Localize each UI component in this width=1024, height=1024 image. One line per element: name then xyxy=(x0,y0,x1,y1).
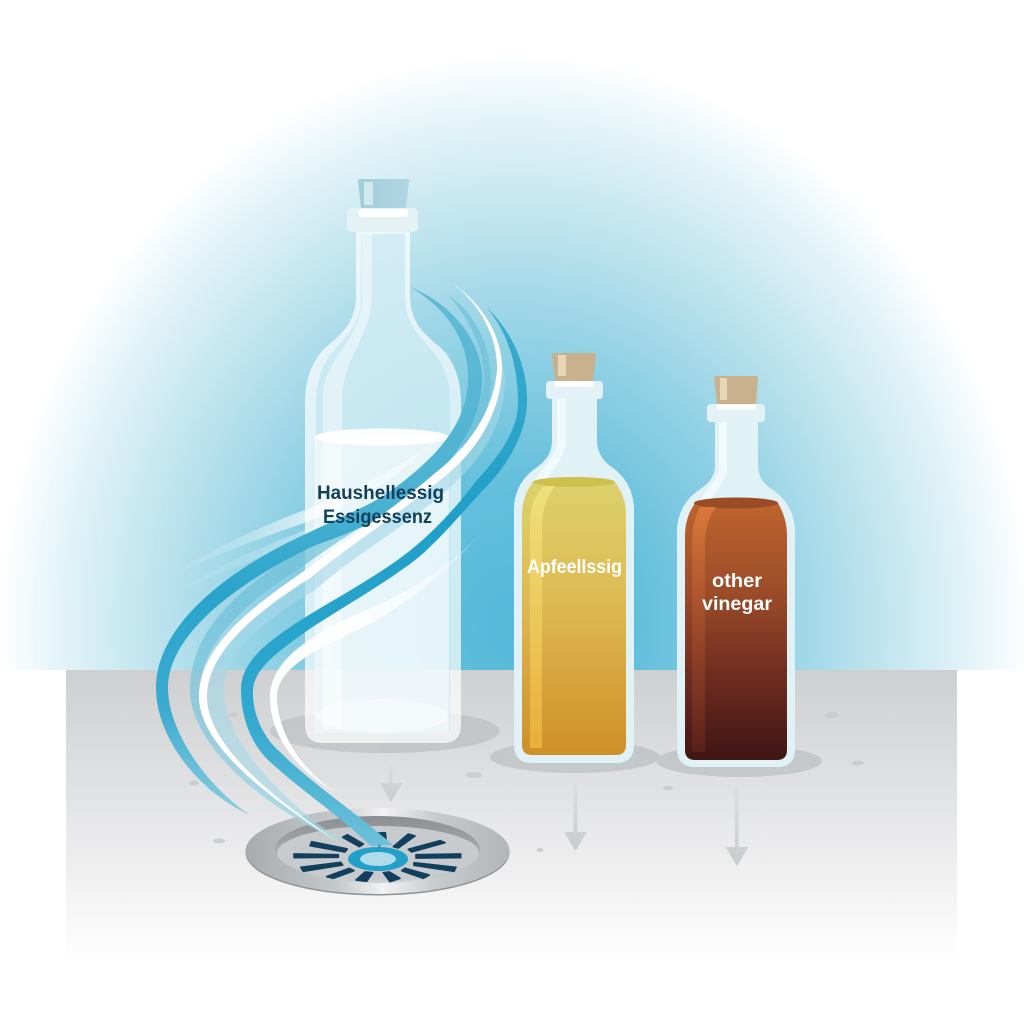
liquid surface xyxy=(694,498,778,508)
label: Haushellessig: Haushellessig xyxy=(317,483,444,504)
lip highlight xyxy=(555,381,594,387)
clear liquid xyxy=(315,437,449,733)
pale stream xyxy=(207,292,505,843)
neck highlight xyxy=(533,399,566,483)
liquid xyxy=(522,482,626,755)
cork highlight xyxy=(720,378,727,400)
translucent ribbon lower xyxy=(168,470,430,598)
neck highlight xyxy=(697,422,727,505)
soft blue stream xyxy=(190,295,491,843)
bottle glass xyxy=(514,399,634,763)
drain centre opening xyxy=(360,852,396,866)
neck highlight xyxy=(323,233,372,730)
liquid xyxy=(685,503,787,760)
countertop xyxy=(66,670,957,962)
label: vinegar: vinegar xyxy=(702,594,773,615)
bottle glass xyxy=(305,232,461,743)
label: Essigessenz: Essigessenz xyxy=(323,507,432,528)
arrow: apple vinegar to drain xyxy=(564,784,587,851)
background glow xyxy=(0,0,1024,670)
side highlight xyxy=(530,486,555,748)
arrow: other vinegar to drain xyxy=(726,786,748,866)
lip xyxy=(707,404,765,422)
label: other: other xyxy=(712,571,763,592)
drain slots xyxy=(294,833,461,882)
drain centre ring xyxy=(348,847,408,871)
stopper highlight xyxy=(364,182,373,205)
drain outer ring xyxy=(246,808,510,894)
lower white stream xyxy=(270,518,492,793)
drain lower edge xyxy=(246,810,510,896)
inner glass tint xyxy=(316,234,450,733)
liquid bottom xyxy=(316,699,448,733)
liquid surface xyxy=(315,428,449,446)
outer left stream xyxy=(156,287,482,815)
white stream xyxy=(199,283,502,843)
lip highlight xyxy=(717,404,756,410)
glass stopper xyxy=(358,179,409,208)
large clear bottle xyxy=(305,179,461,743)
apple vinegar bottle xyxy=(514,353,634,763)
bottle glass xyxy=(677,422,795,767)
cork xyxy=(552,353,596,381)
main blue stream xyxy=(241,308,527,846)
bottle shadows xyxy=(270,709,822,777)
drain xyxy=(246,808,510,896)
lip xyxy=(546,381,603,399)
translucent ribbon upper xyxy=(158,443,432,584)
other vinegar bottle xyxy=(677,376,795,767)
cork highlight xyxy=(558,355,566,376)
drain inner rim xyxy=(275,816,480,883)
countertop speckles xyxy=(189,712,864,852)
lip xyxy=(347,208,418,232)
liquid surface xyxy=(533,477,615,487)
swirling vapour streams xyxy=(156,283,527,846)
arrow: household vinegar to drain xyxy=(380,762,402,802)
lip highlight xyxy=(359,209,408,217)
label: Apfeellssig: Apfeellssig xyxy=(527,557,622,578)
drain plate xyxy=(277,826,479,880)
cork xyxy=(714,376,758,404)
side highlight xyxy=(692,507,716,752)
